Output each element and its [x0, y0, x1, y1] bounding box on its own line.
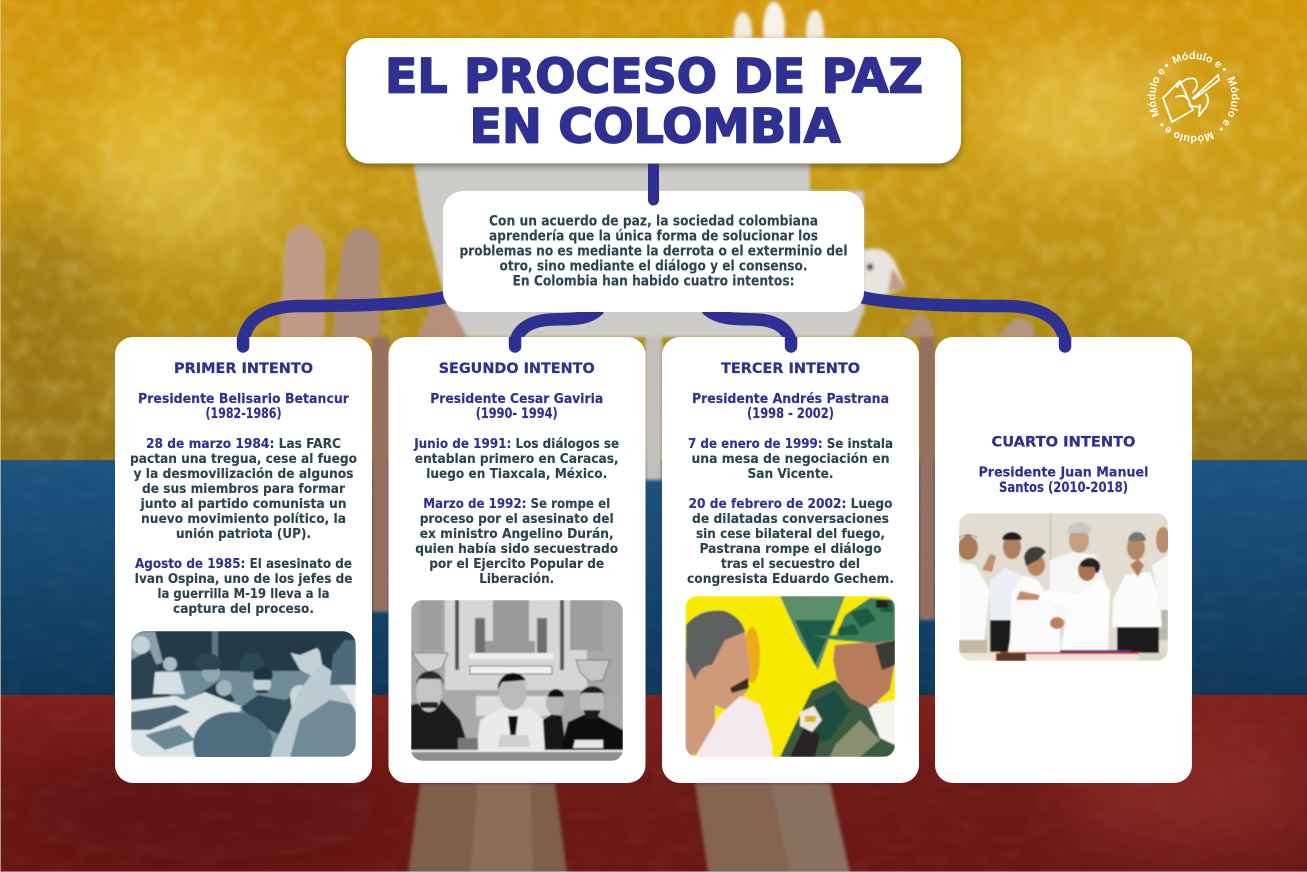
panel: title [346, 38, 961, 164]
panel: intro text box [443, 191, 864, 312]
heading: primer intento: PRIMER INTENTO [174, 360, 313, 377]
intro paragraph: aprendería que la única forma de solucionar los [489, 228, 818, 244]
text block: march 1992: proceso por el asesinato del [420, 512, 614, 527]
circular wordmark: Módulo e• Módulo e•Módulo e•Módulo e• [1147, 51, 1240, 144]
text block: august 1985: la guerrilla M-19 lleva a la [158, 587, 330, 602]
text block: february 2002 [687, 497, 894, 587]
text block: january 1999: una mesa de negociación en [692, 451, 890, 467]
panel: third attempt [662, 337, 919, 783]
photo: officials at a table, black and white [411, 600, 623, 761]
heading: tercer intento: TERCER INTENTO [721, 360, 860, 377]
photo: handshake at the peace signing [958, 513, 1170, 661]
intro paragraph [460, 214, 848, 290]
president: Pastrana [692, 391, 889, 422]
panel: first attempt [115, 337, 372, 783]
title text: EL PROCESO DE PAZ [385, 50, 923, 104]
president: Gaviria: (1990- 1994) [476, 406, 558, 422]
text block: january 1999: 7 de enero de 1999: Se instala [688, 437, 893, 452]
text block: february 2002: de dilatadas conversaciones [692, 512, 889, 527]
intro paragraph: problemas no es mediante la derrota o el exterminio del [460, 244, 848, 260]
heading: segundo intento: SEGUNDO INTENTO [439, 360, 595, 377]
text block: march 1992 [415, 497, 618, 587]
president: Pastrana: (1998 - 2002) [747, 406, 834, 422]
connector: intro to second card [515, 310, 598, 347]
intro paragraph: En Colombia han habido cuatro intentos: [512, 274, 794, 290]
title text: EN COLOMBIA [470, 100, 841, 154]
text block: june 1991: Junio de 1991: Los diálogos se [413, 436, 619, 452]
text block: march 1984: unión patriota (UP). [176, 526, 311, 542]
president: Pastrana: Presidente Andrés Pastrana [692, 391, 889, 407]
text block: february 2002: congresista Eduardo Gechem. [687, 572, 894, 587]
president: Gaviria [430, 391, 603, 422]
text block: august 1985: Agosto de 1985: El asesinato de [135, 557, 352, 572]
panel: fourth attempt [935, 337, 1192, 783]
stem between title and intro [648, 164, 659, 191]
connector: intro to third card [708, 310, 791, 347]
connector: intro to first card [243, 297, 446, 347]
text block: march 1992: Liberación. [479, 571, 554, 587]
president: Gaviria: Presidente Cesar Gaviria [430, 391, 603, 407]
text block: march 1992: quien había sido secuestrado [415, 541, 618, 557]
photo: negotiation table, teal monochrome [131, 631, 356, 757]
text block: june 1991: entablan primero en Caracas, [415, 452, 619, 467]
photo: Pastrana and Marulanda [685, 596, 895, 757]
text block: march 1984: 28 de marzo 1984: Las FARC [146, 437, 341, 452]
text block: march 1992: Marzo de 1992: Se rompe el [423, 497, 610, 512]
logo: Módulo e circular badge [1147, 51, 1240, 144]
text block: february 2002: Pastrana rompe el diálogo [700, 541, 882, 557]
text block: june 1991: luego en Tiaxcala, México. [426, 466, 607, 482]
president: Betancur: (1982-1986) [206, 406, 282, 422]
connector: intro to fourth card [861, 297, 1065, 347]
text block: march 1984: pactan una tregua, cese al fuego [130, 452, 357, 467]
president: Santos [978, 464, 1148, 496]
text block: january 1999: San Vicente. [748, 467, 834, 482]
text block: february 2002: sin cese bilateral del fuego, [696, 527, 885, 542]
text block: march 1992: ex ministro Angelino Durán, [420, 526, 614, 542]
text block: march 1984 [130, 437, 357, 542]
president: Santos: Santos (2010-2018) [999, 480, 1128, 496]
title text [385, 50, 923, 154]
president: Betancur [138, 391, 349, 422]
text block: august 1985 [134, 557, 353, 617]
president: Santos: Presidente Juan Manuel [978, 464, 1148, 480]
panel: second attempt [388, 337, 646, 783]
heading: cuarto intento: CUARTO INTENTO [992, 434, 1136, 450]
text block: march 1984: junto al partido comunista un [140, 497, 346, 512]
president: Betancur: Presidente Belisario Betancur [138, 391, 349, 407]
icon: paper, pencil and paper plane [1163, 75, 1219, 122]
text block: february 2002: tras el secuestro del [721, 557, 860, 572]
text block: march 1984: y la desmovilización de algunos [134, 466, 354, 482]
text block: march 1984: de sus miembros para formar [142, 482, 345, 497]
intro paragraph: otro, sino mediante el diálogo y el consenso. [500, 258, 808, 274]
text block: january 1999 [688, 437, 893, 482]
text block: august 1985: Ivan Ospina, uno de los jefes de [134, 572, 353, 587]
text block: august 1985: captura del proceso. [173, 602, 314, 617]
intro paragraph: Con un acuerdo de paz, la sociedad colombiana [489, 214, 818, 230]
text block: march 1992: por el Ejercito Popular de [429, 557, 604, 572]
text block: march 1984: nuevo movimiento político, la [141, 511, 346, 527]
text block: june 1991 [413, 436, 619, 482]
text block: february 2002: 20 de febrero de 2002: Luego [688, 497, 892, 512]
